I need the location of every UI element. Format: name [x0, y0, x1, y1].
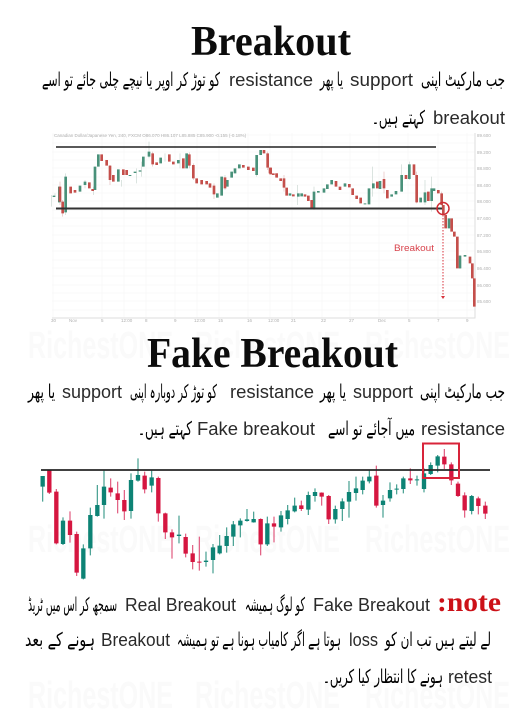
- text block: note: loss: [349, 630, 378, 650]
- text block: fake breakout definition: support: [62, 382, 122, 402]
- text block: fake breakout definition: یا پھر: [319, 381, 346, 403]
- text block: note: ہونے کا انتظار کیا کریں۔: [323, 666, 443, 688]
- axis labels: Dec: [378, 318, 387, 323]
- axis labels: Nov: [69, 318, 78, 323]
- breakout label: Breakout: [394, 243, 435, 253]
- faint watermark text: [28, 325, 510, 717]
- text block: note: retest: [448, 667, 492, 687]
- axis labels: 15: [218, 318, 224, 323]
- text block: fake breakout definition: یا پھر: [27, 381, 55, 403]
- red highlight box: [423, 444, 459, 478]
- faint watermark text: RichestONE: [28, 325, 173, 367]
- resistance line: [56, 146, 436, 148]
- axis labels: 86.800: [477, 249, 491, 254]
- axis labels: 8: [145, 318, 148, 323]
- text block: note: ہونے کے بعد: [25, 629, 95, 651]
- chart grid: [52, 133, 475, 318]
- axis labels: 22: [321, 318, 327, 323]
- axis labels: 88.800: [477, 166, 491, 171]
- text block: note: سمجھ کر اس میں ٹریڈ: [28, 594, 117, 616]
- text block: breakout definition: کہتے ہیں۔: [372, 107, 426, 129]
- axis labels: 27: [349, 318, 355, 323]
- chart: breakout candlesticks: [51, 133, 491, 323]
- faint watermark text: RichestONE: [195, 519, 340, 561]
- axis labels: 12:00: [268, 318, 280, 323]
- breakout circle marker: [437, 202, 449, 214]
- axis labels: 89.200: [477, 150, 491, 155]
- candles left half: [52, 142, 277, 217]
- axis labels: 85.600: [477, 299, 491, 304]
- text block: fake breakout definition: support: [353, 382, 413, 402]
- axis labels: 5: [408, 318, 411, 323]
- breakout dotted arrow: [441, 215, 445, 299]
- axis labels: 87.600: [477, 216, 491, 221]
- horizontal level line: [41, 469, 490, 471]
- text block: fake breakout definition: resistance: [421, 419, 505, 439]
- axis labels: 89.600: [477, 133, 491, 138]
- text block: fake breakout definition: [27, 381, 505, 440]
- text block: fake breakout definition: کہتے ہیں۔: [138, 418, 193, 440]
- axis labels: 86.400: [477, 266, 491, 271]
- text block: note: [25, 587, 501, 688]
- axis labels: 86.000: [477, 283, 491, 288]
- text block: fake breakout definition: resistance: [230, 382, 314, 402]
- axis labels: 88.000: [477, 199, 491, 204]
- faint watermark text: RichestONE: [195, 325, 340, 367]
- axis labels: 21: [291, 318, 297, 323]
- text block: fake breakout definition: کو توڑ کر دوبارہ اپنی: [130, 381, 217, 403]
- text block: note: Real Breakout: [125, 595, 236, 615]
- text block: fake breakout definition: میں آجائے تو اسے: [328, 416, 415, 440]
- axis labels: 12:00: [194, 318, 206, 323]
- chart header text: Canadian Dollar/Japanese Yen, 240, FXCM O86.070 H86.107 L85.885 C85.900 -0.155 (-0.18%): [54, 133, 247, 138]
- text block: breakout definition: breakout: [433, 108, 505, 128]
- text block: note: Breakout: [101, 630, 170, 650]
- axis labels: 87.200: [477, 233, 491, 238]
- candles right half: [274, 449, 485, 542]
- chart axes: [52, 133, 475, 318]
- axis labels: [51, 133, 491, 323]
- text block: breakout definition: support: [350, 70, 413, 90]
- text block: note: کو لوگ ہمیشہ: [245, 594, 305, 616]
- axis labels: 30: [51, 318, 57, 323]
- axis labels: 88.400: [477, 183, 491, 188]
- candles left half: [43, 458, 267, 579]
- chart: fake breakout candlesticks: [41, 444, 490, 579]
- faint watermark text: RichestONE: [195, 675, 340, 717]
- text block: note: Fake Breakout: [313, 595, 430, 615]
- text block: breakout definition: کو توڑ کر اوپر یا نیچے چلی جائے تو اسے: [42, 69, 221, 91]
- text block: breakout definition: یا پھر: [319, 69, 343, 91]
- axis labels: 5: [101, 318, 104, 323]
- axis labels: 9: [174, 318, 177, 323]
- axis labels: 16: [247, 318, 253, 323]
- axis labels: 12:00: [121, 318, 133, 323]
- text block: note: ہوتا ہے اگر کامیاب ہونا ہے تو ہمیشہ: [177, 628, 341, 651]
- title: Fake Breakout: Fake Breakout: [147, 331, 398, 377]
- support line: [56, 208, 442, 210]
- note label: :note: [437, 587, 501, 617]
- faint watermark text: RichestONE: [28, 675, 173, 717]
- faint watermark text: RichestONE: [28, 519, 173, 561]
- title: Breakout: Breakout: [191, 19, 351, 65]
- text block: breakout definition: [42, 69, 505, 129]
- text block: breakout definition: resistance: [229, 70, 313, 90]
- axis labels: 7: [437, 318, 440, 323]
- axis labels: 9: [466, 318, 469, 323]
- text block: fake breakout definition: Fake breakout: [197, 419, 315, 439]
- candles right half: [270, 162, 474, 307]
